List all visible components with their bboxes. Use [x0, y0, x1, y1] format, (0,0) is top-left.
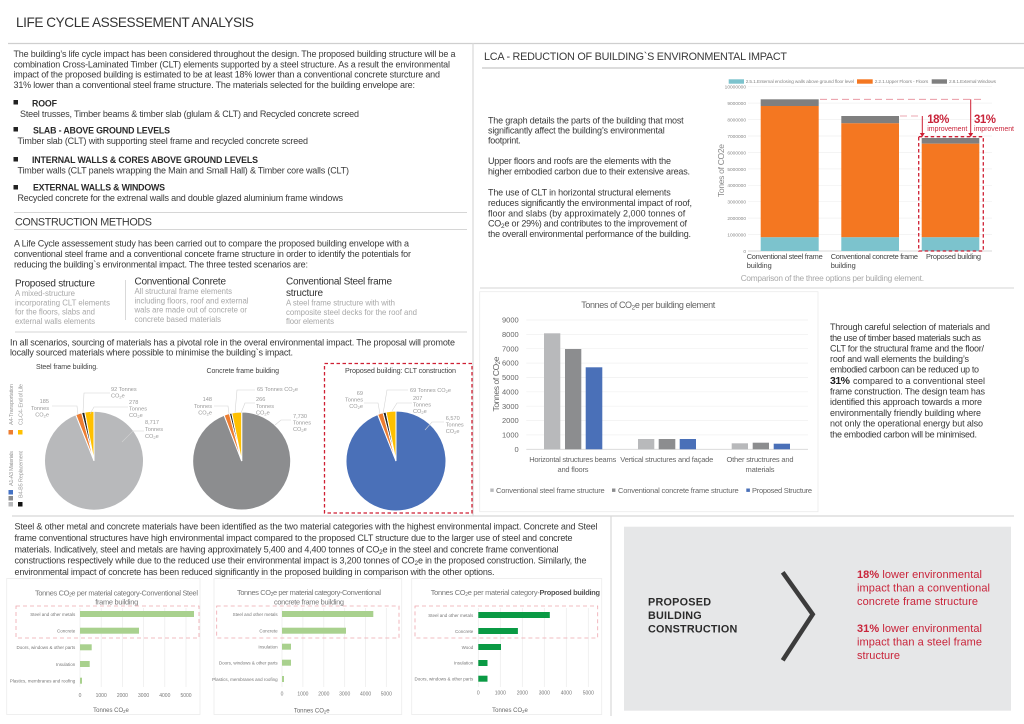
y axis labels: 3000000	[727, 200, 746, 206]
bar chart: proposed building materials: e per material category-	[468, 588, 540, 597]
bar chart: tonnes of CO2e per building element: 2	[632, 304, 636, 312]
category labels: materials	[746, 465, 775, 474]
text block: steel and concrete materials: environmental impact of concrete has been reduced significantly in the proposed building in comparison with the other options.	[14, 567, 495, 577]
pie chart: steel frame building: Tonnes	[145, 427, 163, 433]
bar chart: tonnes of CO2e per building element: e per building element	[635, 300, 716, 310]
bar chart: proposed building materials: Insulation	[454, 660, 474, 666]
panel heading: PROPOSED	[648, 596, 711, 608]
text block: study description: reducing the building`s environmental impact. The three tested scenarios are:	[14, 260, 308, 270]
pie chart: concrete frame building: CO	[198, 410, 207, 416]
chart legend	[729, 79, 997, 85]
list item: internal walls: INTERNAL WALLS & CORES ABOVE GROUND LEVELS	[32, 155, 258, 165]
bar chart: proposed building materials: Tonnes CO	[431, 588, 466, 597]
pie chart: proposed building CLT construction: 2	[454, 430, 457, 435]
bar chart: conventional steel frame building materials: e	[126, 708, 130, 714]
bar chart: conventional concrete frame building materials: 3000	[339, 691, 350, 697]
pie chart: proposed building CLT construction: 207	[413, 396, 422, 402]
pie chart: steel frame building	[31, 364, 163, 510]
text block: graph explanation: 2	[501, 223, 505, 230]
bar chart: conventional steel frame building materials: 4000	[159, 693, 171, 699]
bar chart: conventional steel frame building materials: Insulation	[56, 662, 76, 667]
pie chart: concrete frame building: e	[295, 387, 298, 393]
text block: introduction: 31% lower than a conventional steel frame structure. The materials selected for the building envelope are:	[14, 80, 415, 90]
scenario: proposed structure: A mixed-structure	[15, 289, 75, 298]
text block: careful selection of materials: embodied carboon can be reduced up to	[830, 364, 979, 374]
text block: careful selection of materials: the embodied carbon will be minimised.	[830, 430, 977, 440]
callout: improvement annotations: improvement	[974, 126, 1014, 133]
pie chart: steel frame building: CO	[35, 412, 44, 418]
text block: graph explanation: higher embodied carbon due to their extensive areas.	[488, 166, 690, 176]
bar chart: conventional steel frame building materials: Steel and other metals	[30, 612, 76, 617]
text block: careful selection of materials: frame construction. The design team has	[830, 386, 986, 396]
bar chart: conventional concrete frame building materials: 5000	[381, 691, 392, 697]
callout: 31% lower: 31% lower environmental	[857, 623, 982, 635]
pie chart: concrete frame building: 7,730	[293, 414, 307, 420]
scenario: conventional concrete: wals are made out of concrete or	[134, 306, 247, 315]
bar chart: conventional steel frame building materials: 2	[123, 709, 126, 714]
pie chart: proposed building CLT construction: e	[360, 404, 363, 410]
icon: chevron arrow	[783, 572, 813, 660]
pie chart: steel frame building: 8,717	[145, 420, 159, 426]
callout: 18% lower: impact than a conventional	[857, 582, 990, 594]
list item: external walls: Recycled concrete for the extrenal walls and double glazed aluminium frame windows	[18, 193, 344, 203]
pie chart: steel frame building: Tonnes	[31, 406, 49, 412]
y axis labels: 5000	[502, 373, 519, 382]
panel heading	[648, 596, 737, 635]
y axis labels: 4000000	[727, 183, 746, 189]
pie chart: steel frame building: CO	[111, 394, 119, 400]
category labels: Conventional steel frame	[747, 252, 823, 261]
y axis labels: 7000	[502, 344, 519, 353]
text block: sourcing of materials	[10, 338, 455, 358]
pie chart: concrete frame building: 2	[301, 428, 304, 433]
text block: graph explanation: CO	[488, 218, 501, 228]
text block: study description: conventional steel frame and a conventional concete frame structure in order to identify the potentials for	[14, 249, 411, 259]
text block: introduction	[14, 49, 456, 90]
callout: 18% lower	[857, 569, 990, 608]
stacked bar chart: comparison of three options: Tones of CO2e	[716, 144, 726, 197]
pie chart: proposed building CLT construction: CO	[413, 409, 421, 415]
y axis labels: 9000	[502, 316, 519, 325]
chart legend: Conventional steel frame structure	[496, 486, 605, 495]
text block: graph explanation: footprint.	[488, 136, 521, 146]
pie chart: concrete frame building: Tonnes	[194, 404, 212, 410]
text block: careful selection of materials: not only the operational energy but also	[830, 418, 983, 428]
y axis labels: 10000000	[725, 84, 746, 90]
legend: pie charts	[8, 384, 24, 506]
y axis labels: 6000000	[727, 150, 746, 156]
pie chart: concrete frame building: 266	[256, 397, 265, 403]
list item: roof	[14, 98, 359, 119]
pie chart: proposed building CLT construction: e	[448, 388, 451, 394]
text block: graph explanation: Upper floors and roofs are the elements with the	[488, 156, 671, 166]
pie chart: proposed building CLT construction: 2	[358, 405, 361, 410]
y axis labels: 4000	[502, 387, 519, 396]
scenario: conventional steel frame	[286, 276, 417, 326]
bar chart: conventional steel frame building materials: 2000	[117, 693, 128, 699]
scenario: proposed structure: incorporating CLT elements	[15, 298, 110, 308]
chart legend: 2.5.1.Enternal enclosing walls above ground floor level	[746, 79, 854, 85]
bar: conventional concrete frame	[841, 116, 899, 251]
bar chart: conventional steel frame building materials	[7, 578, 200, 714]
pie chart: concrete frame building: e	[209, 410, 212, 416]
text block: steel and concrete materials: 2	[379, 549, 383, 556]
y axis labels	[725, 84, 746, 255]
scenario: conventional steel frame: structure	[286, 288, 323, 299]
text block: careful selection of materials: compared to a conventional steel	[853, 376, 985, 386]
text block: graph explanation: floor and slabs (by approximately 2,000 tonnes of	[488, 208, 686, 218]
bar chart: conventional concrete frame building materials: Tonnes CO	[237, 588, 271, 597]
pie chart: concrete frame building: Tonnes	[256, 404, 274, 410]
bar chart: tonnes of CO2e per building element: e	[491, 356, 501, 361]
bar chart: conventional concrete frame building materials: e per material category-Conventional	[273, 588, 381, 597]
legend: pie charts: A1-A3 Materials	[9, 451, 15, 486]
text block: careful selection of materials: the use of timber based materials such as	[830, 333, 982, 343]
bar chart: conventional concrete frame building materials: 2	[271, 592, 274, 598]
y axis labels: 7000000	[727, 134, 746, 140]
callout: 31% lower: structure	[857, 650, 900, 662]
chart legend	[490, 486, 812, 495]
bar chart: proposed building materials: 0	[477, 691, 480, 697]
text block: graph explanation: The use of CLT in horizontal structural elements	[488, 188, 671, 198]
bar chart: tonnes of CO2e per building element	[480, 292, 818, 512]
y axis labels	[502, 316, 519, 454]
pie chart: proposed building CLT construction: 69	[357, 391, 363, 397]
text block: introduction: combination Cross-Laminated Timber (CLT) elements supported by a steel structure. As a result the environmental	[14, 59, 450, 69]
category labels: and floors	[558, 465, 589, 474]
bar chart: conventional steel frame building materials: Tonnes CO	[35, 588, 69, 598]
bar chart: conventional concrete frame building materials: Doors, windows & other parts	[219, 660, 278, 666]
bar chart: conventional steel frame building materials: Concrete	[57, 628, 76, 634]
text block: study description	[14, 238, 411, 270]
bar chart: proposed building materials: 4000	[561, 691, 572, 697]
pie chart: steel frame building: e	[46, 412, 49, 418]
bar chart: conventional concrete frame building materials: concrete frame building	[274, 598, 344, 607]
bar chart: conventional steel frame building materials: 1000	[96, 693, 107, 699]
pie chart: steel frame building: 2	[119, 394, 122, 400]
bar chart: conventional concrete frame building materials: 2000	[318, 691, 330, 697]
bar chart: proposed building materials: 1000	[495, 691, 506, 697]
bar chart: proposed building materials: 2	[522, 709, 525, 714]
heading: LCA reduction: LCA - REDUCTION OF BUILDING`S ENVIRONMENTAL IMPACT	[484, 51, 787, 63]
pie chart: concrete frame building: Tonnes	[293, 420, 311, 426]
text block: steel and concrete materials: frame conventional structures have high environmental impact compared to the proposed CLT structure due to the larger use of steel and concrete	[14, 533, 572, 543]
bar chart: conventional steel frame building materials: 0	[79, 693, 82, 699]
text block: careful selection of materials: 31%	[830, 375, 851, 387]
pie chart: proposed building CLT construction: Tonnes	[413, 402, 431, 408]
callout: improvement annotations: improvement	[927, 126, 967, 133]
pie chart: concrete frame building: 148	[203, 397, 212, 403]
callout: improvement annotations	[820, 99, 1014, 251]
pie chart: steel frame building: Tonnes	[129, 406, 147, 412]
bar chart: conventional concrete frame building materials: Plastics, membranes and roofing	[212, 677, 278, 682]
chart legend: Proposed Structure	[752, 486, 812, 495]
bar chart: conventional concrete frame building materials: 1000	[297, 691, 309, 697]
bar: conventional steel frame	[761, 99, 819, 251]
pie chart: concrete frame building: e	[267, 410, 270, 416]
bar chart: tonnes of CO2e per building element: Tonnes of CO	[581, 300, 632, 310]
list item: external walls	[14, 182, 344, 203]
bar chart: proposed building materials: 2	[465, 592, 468, 598]
text block: steel and concrete materials	[14, 522, 597, 577]
bar chart: proposed building materials: Wood	[462, 645, 474, 650]
bar chart: conventional concrete frame building materials: 0	[281, 691, 284, 697]
pie chart: concrete frame building: 2	[293, 388, 296, 393]
pie chart: concrete frame building: 2	[207, 412, 210, 416]
bars group: other structures	[732, 443, 790, 449]
text block: careful selection of materials: roof and wall elements the building’s	[830, 354, 970, 364]
bar chart: conventional steel frame building materials: Doors, windows & other parts	[17, 645, 76, 650]
category labels: building	[831, 261, 856, 270]
chart caption: Comparison of the three options per building element.	[741, 273, 924, 283]
pie chart: steel frame building: e	[140, 413, 143, 419]
pie chart: steel frame building: 2	[44, 414, 47, 418]
scenario: conventional steel frame: floor elements	[286, 317, 334, 326]
bar chart: proposed building materials: Tonnes CO	[492, 708, 522, 714]
pie chart: proposed building CLT construction: Proposed building: CLT construction	[345, 366, 456, 375]
text block: graph explanation	[488, 116, 692, 239]
bar chart: conventional concrete frame building materials: Concrete	[259, 628, 278, 634]
bars group: vertical structures	[638, 439, 696, 449]
list item: external walls: EXTERNAL WALLS & WINDOWS	[33, 182, 165, 192]
chart legend: Conventional concrete frame structure	[618, 486, 739, 495]
text block: graph explanation: significantly affect the building’s environmental	[488, 126, 665, 136]
legend: pie charts: C1-C4- End of Life	[18, 384, 24, 425]
pie chart: proposed building CLT construction: 6,570	[446, 416, 460, 422]
bar chart: conventional concrete frame building materials: Insulation	[258, 644, 278, 650]
text block: steel and concrete materials: 2	[414, 560, 418, 567]
category labels: Other structrures and	[726, 455, 794, 464]
pie chart: proposed building CLT construction: 2	[446, 389, 449, 394]
y axis labels: 0	[515, 445, 519, 454]
scenario: conventional concrete	[134, 276, 249, 324]
y axis labels: 9000000	[727, 101, 746, 107]
bar chart: proposed building materials: Doors, windows & other parts	[415, 676, 474, 682]
text block: steel and concrete materials: materials. Indicatively, steel and metals are having approximately 5,400 and 4,400 tonnes of CO	[14, 544, 379, 554]
bar chart: conventional concrete frame building materials	[212, 578, 402, 715]
category labels	[529, 455, 794, 474]
pie chart: steel frame building: CO	[129, 413, 137, 419]
list item: slab: Timber slab (CLT) with supporting steel frame and recycled concrete screed	[18, 136, 308, 146]
scenario: conventional steel frame: A steel frame structure with with	[286, 298, 395, 308]
bar chart: conventional concrete frame building materials: Steel and other metals	[233, 612, 278, 617]
panel: proposed building construction summary	[624, 527, 1011, 711]
text block: graph explanation: the overall environmental performance of the building.	[488, 229, 691, 239]
pie chart: concrete frame building: e	[304, 427, 307, 433]
bar chart: proposed building materials: 2000	[517, 691, 528, 697]
list item: slab: SLAB - ABOVE GROUND LEVELS	[33, 126, 170, 136]
bar chart: conventional steel frame building materials: 3000	[138, 693, 149, 699]
pie chart: proposed building CLT construction: Tonnes	[345, 398, 363, 404]
bar chart: proposed building materials: e	[525, 708, 529, 714]
pie chart: steel frame building: 185	[40, 399, 49, 405]
bar chart: proposed building materials: Steel and other metals	[428, 613, 474, 618]
bar chart: proposed building materials	[412, 578, 602, 714]
scenario: proposed structure	[15, 278, 110, 326]
bar chart: tonnes of CO2e per building element: 2	[496, 360, 502, 364]
legend: pie charts: B4-B5 Replacement	[18, 451, 24, 498]
text block: careful selection of materials	[830, 322, 990, 440]
list item: roof: ROOF	[32, 98, 58, 108]
pie chart: proposed building CLT construction: CO	[349, 404, 358, 410]
bar chart: proposed building materials: 5000	[583, 691, 594, 697]
bar chart: conventional steel frame building materials: Plastics, membranes and roofing	[10, 678, 76, 684]
y axis labels: 0	[743, 249, 746, 255]
text block: introduction: The building’s life cycle impact has been considered throughout the design. The proposed building structure will be a	[14, 49, 456, 59]
text block: steel and concrete materials: constructions respectively while due to the reduced use their environmental impact is 3,200 tonnes of CO	[14, 556, 415, 566]
legend: pie charts: A4-Transportation	[9, 384, 15, 425]
pie chart: steel frame building: 2	[137, 414, 140, 419]
y axis labels: 8000	[502, 330, 519, 339]
scenario: conventional concrete: concrete based materials	[134, 315, 221, 324]
y axis labels: 2000	[502, 416, 519, 425]
pie chart: steel frame building: 92 Tonnes	[111, 387, 137, 393]
pie chart: concrete frame building	[193, 368, 311, 510]
callout: 18% lower: concrete frame structure	[857, 596, 978, 608]
bar chart: conventional concrete frame building materials: e	[326, 709, 330, 715]
panel heading: BUILDING	[648, 610, 702, 622]
bar: proposed building	[922, 138, 979, 251]
text block: graph explanation: e or 29%) and contributes to the improvement of	[504, 218, 687, 228]
pie chart: proposed building CLT construction: e	[424, 409, 427, 415]
pie chart: proposed building CLT construction	[324, 364, 472, 513]
callout: 31% lower	[857, 623, 982, 662]
pie chart: steel frame building: 2	[153, 435, 156, 440]
scenario: conventional concrete: including floors, roof and external	[134, 296, 249, 306]
y axis labels: 1000	[502, 430, 519, 440]
category labels	[747, 252, 981, 270]
scenario: conventional steel frame: composite steel decks for the roof and	[286, 308, 417, 317]
bar chart: conventional steel frame building materials: 2	[69, 592, 72, 598]
text block: careful selection of materials: CLT for the structural frame and the floor/	[830, 344, 984, 354]
pie chart: steel frame building: e	[156, 434, 159, 440]
y axis labels: 6000	[502, 359, 519, 368]
bar chart: conventional steel frame building materials: 5000	[180, 693, 192, 699]
text block: sourcing of materials: In all scenarios, sourcing of materials has a pivotal role in the overal environmental impact. The proposal will promote	[10, 338, 455, 348]
bar chart: proposed building materials: Concrete	[455, 629, 474, 634]
pie chart: steel frame building: Steel frame building.	[36, 364, 98, 371]
panel heading: CONSTRUCTION	[648, 623, 737, 635]
text block: steel and concrete materials: e in the proposed construction. Similarly, the	[418, 556, 586, 566]
bars group: horizontal structures	[544, 333, 602, 449]
y axis labels: 1000000	[727, 232, 746, 238]
pie chart: concrete frame building: 2	[264, 412, 267, 416]
scenario: proposed structure: for the floors, slabs and	[15, 308, 95, 317]
chart legend: 2.2.1.Upper Floors - Floors	[875, 79, 929, 85]
pie chart: concrete frame building: CO	[293, 427, 301, 433]
text block: careful selection of materials: Through careful selection of materials and	[830, 322, 990, 332]
text block: steel and concrete materials: Steel & other metal and concrete materials have been identified as the two material categories with the highest environmental impact. Concrete and Steel	[14, 522, 597, 532]
pie chart: proposed building CLT construction: e	[456, 429, 459, 435]
pie chart: proposed building CLT construction: CO	[446, 429, 454, 435]
bar chart: conventional concrete frame building materials: 2	[324, 710, 327, 715]
y axis labels: 3000	[502, 402, 519, 411]
callout: 18% lower: 18% lower environmental	[857, 569, 982, 581]
text block: steel and concrete materials: e in the steel and concrete frame conventional	[383, 544, 558, 554]
scenario: conventional concrete: All structural frame elements	[134, 287, 232, 296]
pie chart: proposed building CLT construction: 69 Tonnes CO	[410, 388, 446, 394]
list item: internal walls	[14, 155, 349, 176]
text block: graph explanation: reduces significantly the environmental impact of roof,	[488, 198, 692, 208]
category labels: Proposed building	[926, 252, 981, 261]
text block: study description: A Life Cycle assessement study has been carried out to compare the proposed building envelope with a	[14, 238, 409, 248]
callout: improvement annotations: 31%	[974, 114, 996, 126]
title: LIFE CYCLE ASSESSEMENT ANALYSIS	[16, 15, 254, 30]
callout: improvement annotations: 18%	[927, 114, 949, 126]
text block: introduction: impact of the proposed building is estimated to be at least 18% lower than a conventional concrete sturcture and	[14, 70, 440, 80]
list item: internal walls: Timber walls (CLT panels wrapping the Main and Small Hall) & Timber core walls (CLT)	[18, 166, 349, 176]
stacked bar chart: comparison of three options	[716, 79, 1014, 270]
category labels: building	[747, 261, 772, 270]
category labels: Conventional concrete frame	[831, 252, 918, 261]
text block: sourcing of materials: locally sourced materials where possible to minimise the building`s impact.	[10, 348, 293, 358]
pie chart: steel frame building: 278	[129, 400, 138, 406]
scenario: proposed structure: external walls elements	[15, 317, 95, 326]
list item: slab	[14, 126, 308, 146]
pie chart: proposed building CLT construction: Tonnes	[446, 422, 464, 428]
text block: graph explanation: The graph details the parts of the building that most	[488, 116, 684, 126]
bar chart: conventional concrete frame building materials: 4000	[360, 691, 371, 697]
callout: 31% lower: impact than a steel frame	[857, 636, 982, 648]
pie chart: concrete frame building: CO	[256, 410, 264, 416]
list item: roof: Steel trusses, Timber beams & timber slab (glulam & CLT) and Recycled concrete screed	[20, 109, 359, 119]
category labels: Vertical structures and façade	[620, 455, 713, 464]
list: building envelope materials	[14, 98, 359, 203]
pie chart: proposed building CLT construction: 2	[421, 410, 424, 415]
pie chart: steel frame building: CO	[145, 434, 153, 440]
text block: careful selection of materials: identified this approach towards a more	[830, 397, 982, 407]
bar chart: conventional steel frame building materials: frame building	[95, 598, 138, 606]
bar chart: proposed building materials: 3000	[539, 691, 550, 697]
bar chart: proposed building materials: Proposed building	[539, 588, 600, 597]
pie chart: steel frame building: e	[122, 394, 125, 400]
heading: construction methods: CONSTRUCTION METHODS	[15, 216, 152, 228]
scenario: proposed structure: Proposed structure	[15, 278, 95, 290]
scenario: conventional steel frame: Conventional Steel frame	[286, 276, 392, 288]
bar chart: conventional concrete frame building materials: Tonnes CO	[294, 709, 324, 715]
category labels: Horizontal structures beams	[529, 455, 616, 464]
bar chart: conventional steel frame building materials: e per material category-Conventional Steel	[71, 588, 198, 598]
y axis labels: 2000000	[727, 216, 746, 222]
bar chart: conventional steel frame building materials: Tonnes CO	[93, 708, 123, 714]
pie chart: concrete frame building: 65 Tonnes CO	[257, 387, 293, 393]
bar chart: tonnes of CO2e per building element: Tonnes of CO	[491, 364, 501, 412]
pie chart: concrete frame building: Concrete frame building	[206, 368, 279, 375]
chart legend: 2.8.1.External Windows	[949, 79, 997, 85]
y axis labels: 5000000	[727, 167, 746, 173]
y axis labels: 8000000	[727, 118, 746, 124]
text block: careful selection of materials: environmentally friendly building where	[830, 408, 981, 418]
scenario: conventional concrete: Conventional Conrete	[134, 276, 226, 288]
